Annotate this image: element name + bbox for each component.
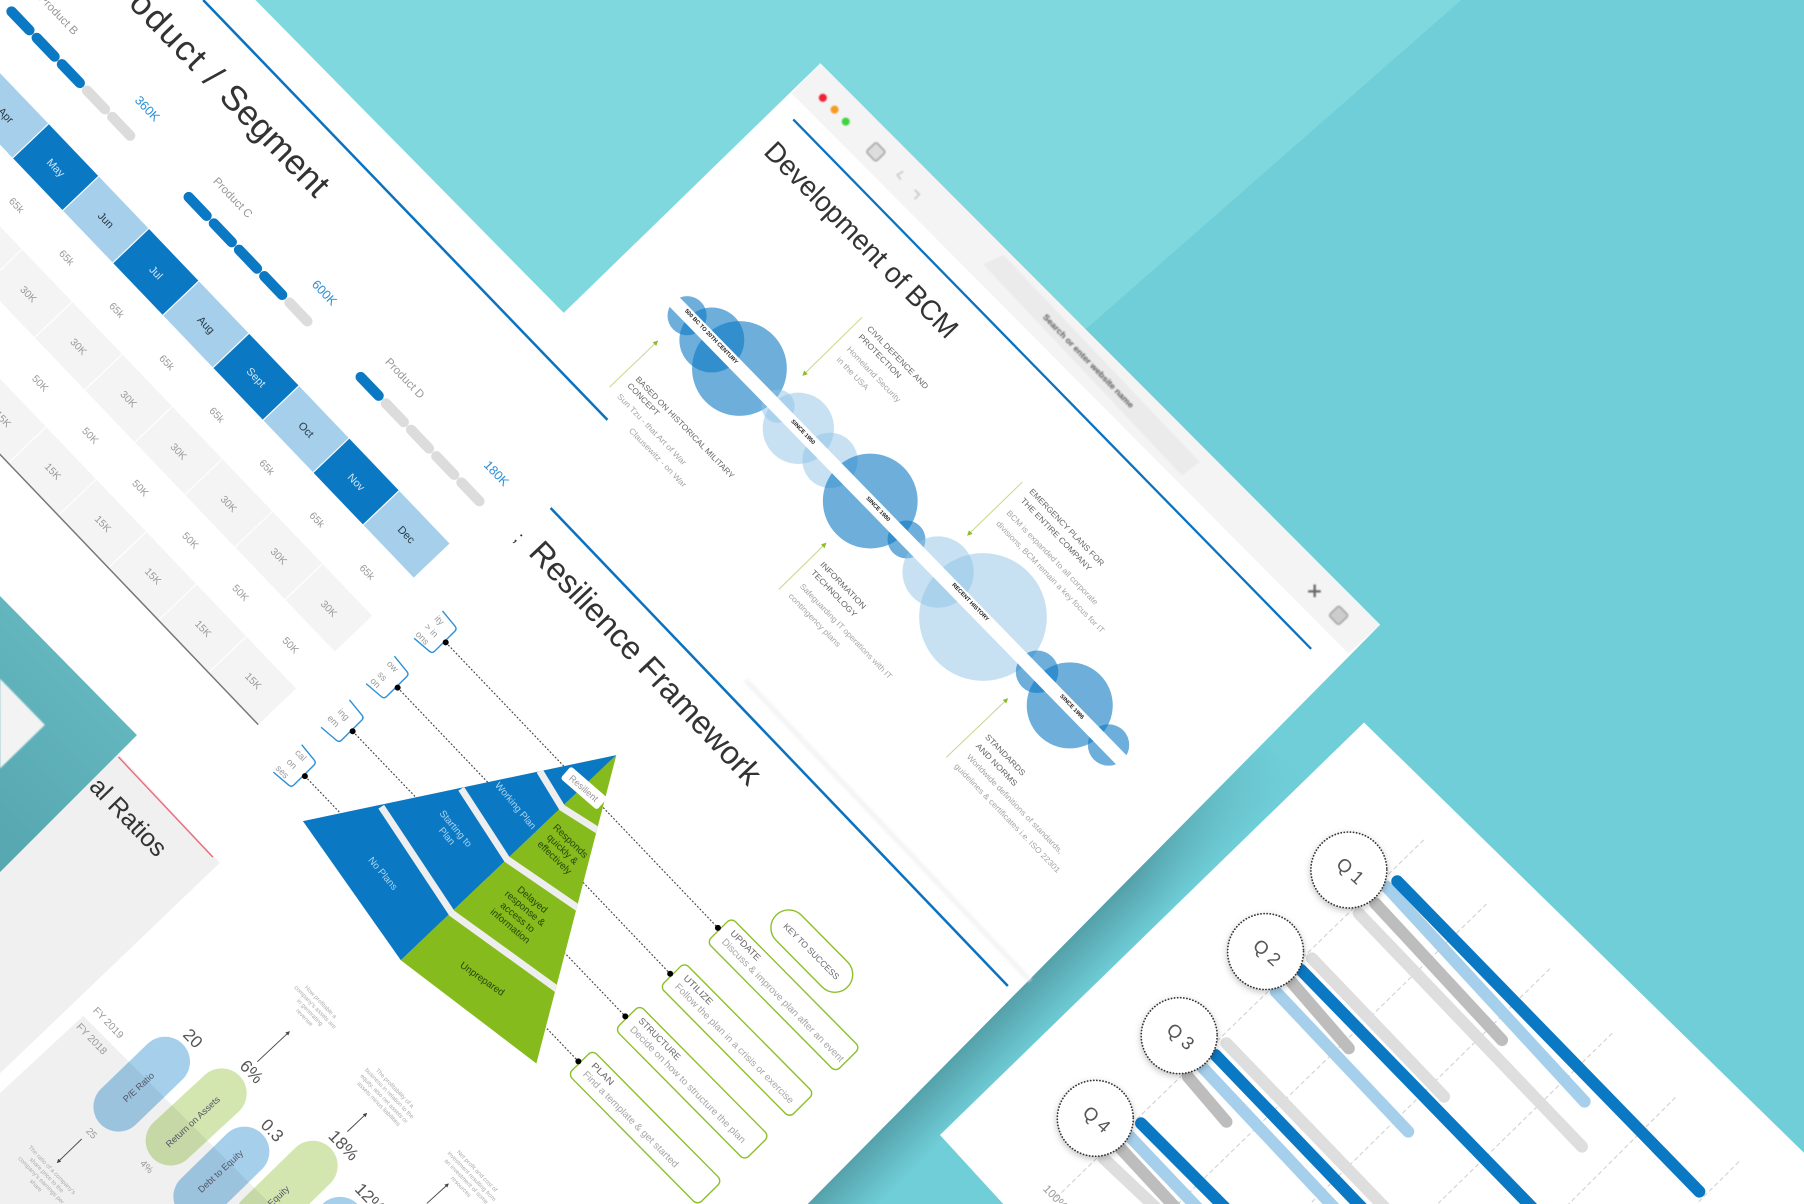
tier labels: green: Unprepared: [458, 960, 506, 999]
address field: [983, 255, 1200, 476]
month header cells: Oct: [295, 420, 316, 441]
pill labels: Debt to Equity: [196, 1148, 245, 1195]
dotted connectors: [305, 642, 718, 1061]
blurb: return on assets: How profitable a: [303, 985, 338, 1021]
stripe labels: SINCE 1980: [864, 496, 891, 523]
callout: civil defence: in the USA: [835, 355, 871, 392]
row: 15K: 15K: [92, 514, 113, 535]
box: structure: Decide on how to structure the plan: [627, 1024, 748, 1146]
callout: information technology: Safeguarding IT operations with IT: [798, 582, 894, 681]
values: 4%: [137, 1158, 155, 1176]
shadow: cast by browser sheet: [808, 764, 1247, 1204]
pyramid: tier separators: [381, 771, 607, 994]
window dots: [819, 94, 850, 126]
box: utilize: [660, 963, 814, 1118]
dot: update: [715, 925, 721, 931]
table baseline: [0, 140, 258, 725]
blurb: price earnings: share price to the: [28, 1157, 65, 1195]
timeline stripe: [667, 295, 1130, 769]
month header cells: Dec: [395, 524, 417, 547]
badge: key to success: KEY TO SUCCESS: [782, 921, 842, 982]
values: 25: [83, 1126, 99, 1142]
pyramid: blue side: [303, 755, 616, 960]
title rule: [551, 508, 1008, 986]
blurb: price earnings: The ratio of a company's: [27, 1145, 76, 1196]
toolbar icons: [866, 142, 1348, 625]
month header cells: Nov: [345, 472, 367, 494]
pills: [118, 1062, 340, 1204]
row: 30K: 30K: [268, 546, 288, 567]
column labels: FY 2019: [90, 1006, 125, 1041]
month header cells: Aug: [195, 314, 217, 337]
address text: Search or enter website name: [1041, 312, 1136, 410]
tag: critical: ses: [274, 763, 291, 781]
tier labels: green: quickly &: [544, 832, 580, 868]
title rule: [119, 757, 213, 857]
value: 180K: 180K: [481, 458, 512, 489]
month header cells: Sept: [244, 366, 268, 390]
callout: historical military: Sun Tzu - that Art of War: [615, 392, 688, 467]
heading fragment: ;: [510, 528, 529, 546]
callout: emergency plans: [968, 482, 1106, 635]
row: 15K: 15K: [242, 671, 263, 692]
callout: emergency plans: THE ENTIRE COMPANY: [1019, 496, 1094, 573]
row: 15K: 15K: [192, 619, 213, 640]
grid lines: [1054, 840, 1739, 1204]
month header cells: May: [44, 157, 67, 180]
tag: follow: ow: [385, 659, 400, 674]
blurb: return on equity: assets minus liabilities: [355, 1081, 401, 1128]
badge: Q4: Q 4: [1079, 1101, 1115, 1137]
callout: historical military: BASED ON HISTORICAL MILITARY: [634, 375, 736, 481]
tier labels: blue: No Plans: [365, 855, 399, 893]
badge: Q3: Q 3: [1163, 1019, 1199, 1054]
tag: planning: ing: [336, 707, 351, 722]
dot: utilize: [667, 971, 673, 977]
tier labels: blue: Starting to: [437, 808, 474, 850]
tier labels: green: information: [488, 907, 532, 946]
callout: emergency plans: divisions, BCM remain a key focus for IT: [994, 519, 1106, 635]
box: update: UPDATE: [728, 928, 763, 963]
tier labels: green: response &: [502, 889, 547, 929]
label: product D: Product D: [382, 356, 426, 401]
row: 50K: 50K: [79, 426, 100, 447]
callout: emergency plans: EMERGENCY PLANS FOR: [1027, 487, 1106, 568]
heading: ratios: al Ratios: [84, 772, 172, 862]
column labels: [74, 1006, 125, 1057]
tag: resilient: [560, 766, 607, 810]
box: update: [707, 918, 860, 1072]
value: 600K: 600K: [309, 277, 340, 309]
box: utilize: Follow the plan in a crisis or exercise: [672, 982, 796, 1106]
panel: faint sheet shadow: [746, 680, 1030, 980]
pill labels: [121, 1070, 292, 1204]
callout: historical military: Clausewitz - on War: [627, 426, 688, 489]
row: 15K: 15K: [42, 462, 63, 483]
sheet: [940, 723, 1804, 1204]
panel: product segment table: [0, 0, 607, 725]
row: 65k: 65k: [56, 249, 76, 269]
tier labels: green: Delayed: [515, 884, 549, 916]
row: 30K: 30K: [67, 337, 88, 358]
row bands: [0, 163, 354, 707]
circles: era two: [761, 389, 858, 488]
callout: standards and norms: STANDARDS: [983, 732, 1027, 778]
tag: follow: on: [368, 676, 383, 690]
circles: era three: [823, 454, 925, 558]
row: 50K: [29, 373, 300, 656]
box: plan: [568, 1050, 722, 1204]
timeline circles: [667, 295, 1130, 769]
panel: left grey sheet corner: [0, 679, 45, 769]
row: 30K: [17, 284, 339, 620]
month header cells: Jun: [95, 210, 116, 231]
circles: era four: [902, 536, 1047, 681]
blurb: price earnings: share: [28, 1179, 43, 1194]
values: 20: [179, 1024, 207, 1052]
tier labels: green: effectively: [535, 839, 574, 877]
heading: resilience framework: Resilience Framework: [522, 534, 770, 792]
callout: information technology: contingency plans: [787, 592, 842, 649]
blurb: return on equity: The profitability of a: [374, 1068, 415, 1110]
column labels: FY 2018: [74, 1022, 109, 1057]
product B progress: [12, 12, 130, 136]
toolbar: [792, 63, 1380, 653]
header block: [0, 754, 220, 1073]
row: 50K: 50K: [280, 635, 300, 656]
tier labels: blue: [365, 780, 538, 893]
panel: financial ratios: [0, 754, 502, 1204]
title rule: [793, 119, 1311, 649]
values: 0.3: [257, 1115, 288, 1146]
badge: Q1: Q 1: [1332, 853, 1368, 888]
callout: emergency plans: BCM is expanded to all corporate: [1005, 509, 1100, 607]
badge: Q4: [1057, 1080, 1133, 1156]
values: 6%: [236, 1056, 268, 1087]
bars: Q3: [1188, 1043, 1385, 1204]
row: 50K: 50K: [29, 373, 50, 394]
row: 65k: 65k: [206, 406, 226, 426]
circles: era one: [668, 296, 787, 416]
pill labels: Return on Assets: [164, 1094, 222, 1149]
values: [83, 1024, 389, 1204]
badge: Q2: Q 2: [1249, 935, 1285, 970]
bars: Q4: [1104, 1123, 1225, 1204]
tag: resilient: Resilient: [567, 773, 601, 804]
callout: standards and norms: guidelines & certificates i.e. ISO 22301: [952, 762, 1062, 875]
pill labels: P/E Ratio: [121, 1070, 156, 1104]
box: update: Discuss & improve plan after an event: [719, 937, 846, 1065]
tier labels: green: Responds: [550, 822, 590, 861]
callout: information technology: [779, 543, 894, 681]
callout: standards and norms: [946, 699, 1065, 875]
product C progress: [189, 197, 307, 321]
tag: activity: > in: [422, 622, 440, 639]
title rule: [203, 0, 607, 420]
row: 65k: 65k: [6, 196, 26, 216]
month header cells: Jul: [146, 264, 165, 282]
dot: structure: [622, 1013, 628, 1019]
blurb: return on equity: business in relation to the: [363, 1068, 415, 1121]
tag: planning: [321, 700, 363, 741]
callout: information technology: INFORMATION: [818, 560, 868, 611]
badge: Q2: [1228, 914, 1304, 990]
tag: planning: em: [325, 713, 342, 729]
tag: critical: on: [285, 757, 299, 771]
callout: information technology: TECHNOLOGY: [809, 568, 859, 620]
callout: civil defence: CIVIL DEFENCE AND: [865, 324, 930, 391]
panel: development of BCM: [610, 119, 1311, 875]
tag: activity: ity: [433, 614, 446, 627]
row: 30K: 30K: [117, 389, 138, 410]
callout: historical military: CONCEPT: [625, 381, 661, 418]
row: 30K: 30K: [218, 494, 238, 515]
stripe labels: 500 BC TO 20TH CENTURY: [683, 308, 739, 366]
values: 18%: [325, 1126, 363, 1165]
badge: Q1: [1311, 832, 1387, 908]
tag: activity: [414, 611, 456, 652]
blurb: return on assets: in generating: [295, 998, 323, 1027]
row: 65k: 65k: [307, 511, 327, 531]
tag: critical: [273, 745, 315, 786]
tag: critical: cal: [293, 748, 308, 763]
heading: development of BCM: Development of BCM: [758, 135, 965, 344]
panel: resilience framework: [273, 508, 1008, 1204]
blurb: return on investment: resources: [449, 1176, 472, 1199]
tag: follow: [366, 656, 408, 698]
row: 15K: [0, 409, 263, 692]
tag: follow: ss: [376, 669, 389, 683]
box: structure: STRUCTURE: [637, 1016, 683, 1062]
left tags: [273, 611, 456, 786]
tier labels: blue: Plan: [436, 825, 457, 847]
background: lighter teal facet: [255, 0, 1461, 575]
callout: historical military: [610, 341, 736, 489]
row: 30K: 30K: [168, 442, 188, 463]
panel: browser window chrome: [792, 63, 1380, 653]
pyramid: green side: [401, 755, 616, 1064]
stripe labels: RECENT HISTORY: [950, 582, 990, 623]
bars: Q2: [1276, 958, 1535, 1204]
panel: left teal gap: [0, 596, 137, 872]
arrows: [57, 1032, 448, 1203]
panel: main white sheet: [0, 0, 1380, 1204]
stripe labels: [683, 308, 1085, 721]
tier labels: green: access to: [498, 900, 537, 936]
value: 360K: 360K: [132, 93, 163, 125]
row: 50K: 50K: [179, 531, 200, 552]
blurb: return on equity: equity, also net assets or: [358, 1074, 408, 1125]
box: structure: [615, 1005, 769, 1160]
row: 65k: 65k: [257, 458, 277, 478]
label: product C: Product C: [210, 175, 254, 221]
bars: Q1: [1359, 881, 1699, 1192]
badge: key to success: [764, 903, 860, 1000]
box: utilize: UTILIZE: [681, 973, 715, 1007]
stripe labels: SINCE 1950: [789, 419, 816, 446]
callout: civil defence: Homeland Security: [845, 345, 903, 404]
row: 65k: 65k: [106, 301, 126, 321]
row: 30K: 30K: [17, 284, 38, 305]
blurb: return on assets: company's assets are: [292, 985, 337, 1031]
blurb: return on investment: investment resulting from: [446, 1151, 496, 1203]
callout: civil defence: [803, 317, 930, 404]
tier labels: green: [458, 822, 590, 999]
stripe labels: SINCE 1996: [1058, 694, 1085, 721]
callout: standards and norms: Worldwide definitions of standards,: [965, 753, 1065, 856]
panel: quarterly chart: [940, 723, 1804, 1204]
row: 65k: [6, 196, 377, 583]
pyramid: [303, 755, 616, 1064]
row: 65k: 65k: [156, 353, 176, 374]
callout: standards and norms: AND NORMS: [974, 742, 1019, 788]
row: 50K: 50K: [229, 583, 250, 604]
product D progress: [361, 377, 479, 501]
blurb: return on assets: revenue: [294, 1008, 314, 1028]
table: months and values: [0, 0, 450, 725]
callout: civil defence: PROTECTION: [857, 332, 903, 380]
row: 50K: 50K: [129, 478, 150, 499]
FY 2018 column: [0, 1016, 270, 1204]
tier labels: blue: Working Plan: [492, 780, 538, 832]
row: 15K: 15K: [142, 566, 163, 587]
row: 30K: 30K: [318, 599, 339, 620]
badge: Q3: [1141, 998, 1217, 1074]
box: plan: PLAN: [589, 1061, 616, 1087]
blurb: return on investment: Net profit and cost of: [455, 1150, 498, 1194]
dot: plan: [575, 1058, 581, 1064]
box: plan: Find a template & get started: [580, 1069, 680, 1170]
tag: activity: ons: [414, 629, 431, 647]
row: 65k: 65k: [357, 563, 377, 583]
circles: era five: [1016, 650, 1129, 766]
month header cells: [0, 72, 450, 578]
